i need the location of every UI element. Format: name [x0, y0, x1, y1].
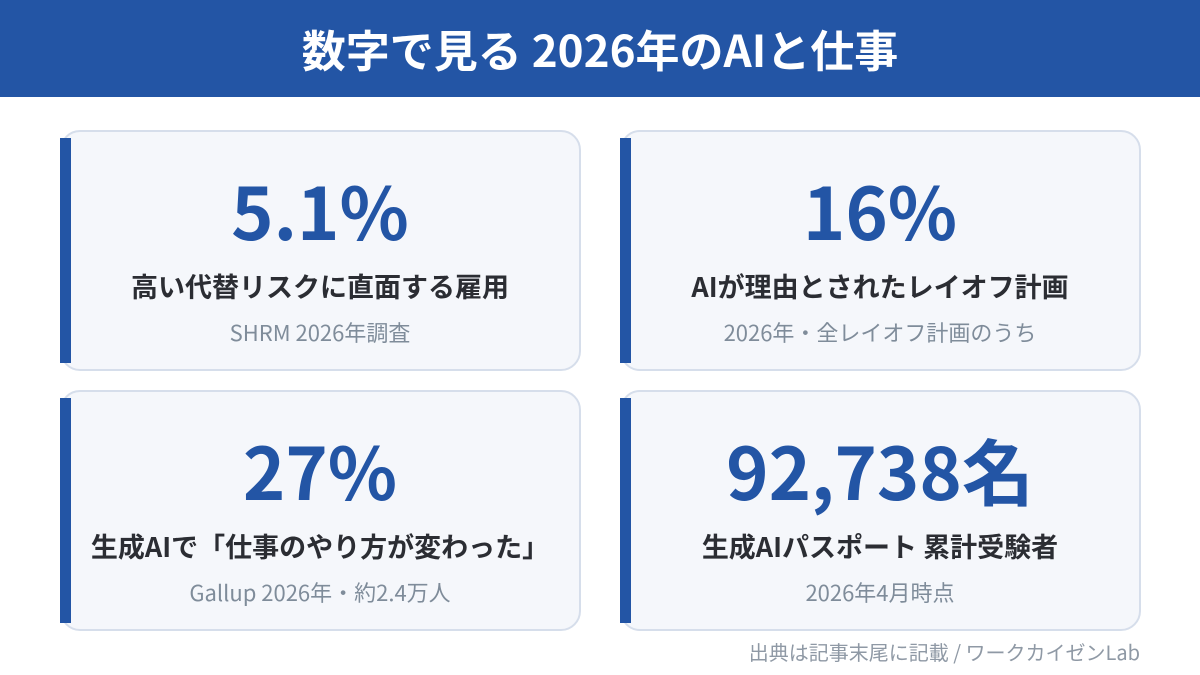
- accent bar: [60, 138, 71, 363]
- label: 生成AIで「仕事のやり方が変わった」: [91, 526, 549, 565]
- panel: 5.1%: [60, 130, 581, 371]
- title: [0, 0, 1200, 97]
- label: 生成AIパスポート 累計受験者: [702, 526, 1058, 565]
- source: 2026年・全レイオフ計画のうち: [724, 316, 1036, 348]
- number: 27%: [243, 416, 397, 521]
- label: 高い代替リスクに直面する雇用: [131, 266, 509, 305]
- number: 5.1%: [231, 156, 409, 261]
- title: 数字で見る 2026年のAIと仕事: [302, 16, 898, 80]
- panel: 92,738名: [620, 390, 1141, 631]
- accent bar: [620, 398, 631, 623]
- panel: 27%: [60, 390, 581, 631]
- source: SHRM 2026年調査: [230, 316, 410, 348]
- source: 2026年4月時点: [805, 576, 955, 608]
- accent bar: [620, 138, 631, 363]
- footer source note: 出典は記事末尾に記載 / ワークカイゼンLab: [749, 637, 1140, 666]
- number: 16%: [803, 156, 957, 261]
- number: 92,738名: [726, 416, 1034, 521]
- panel: 16%: [620, 130, 1141, 371]
- source: Gallup 2026年・約2.4万人: [189, 576, 451, 608]
- label: AIが理由とされたレイオフ計画: [691, 266, 1069, 305]
- accent bar: [60, 398, 71, 623]
